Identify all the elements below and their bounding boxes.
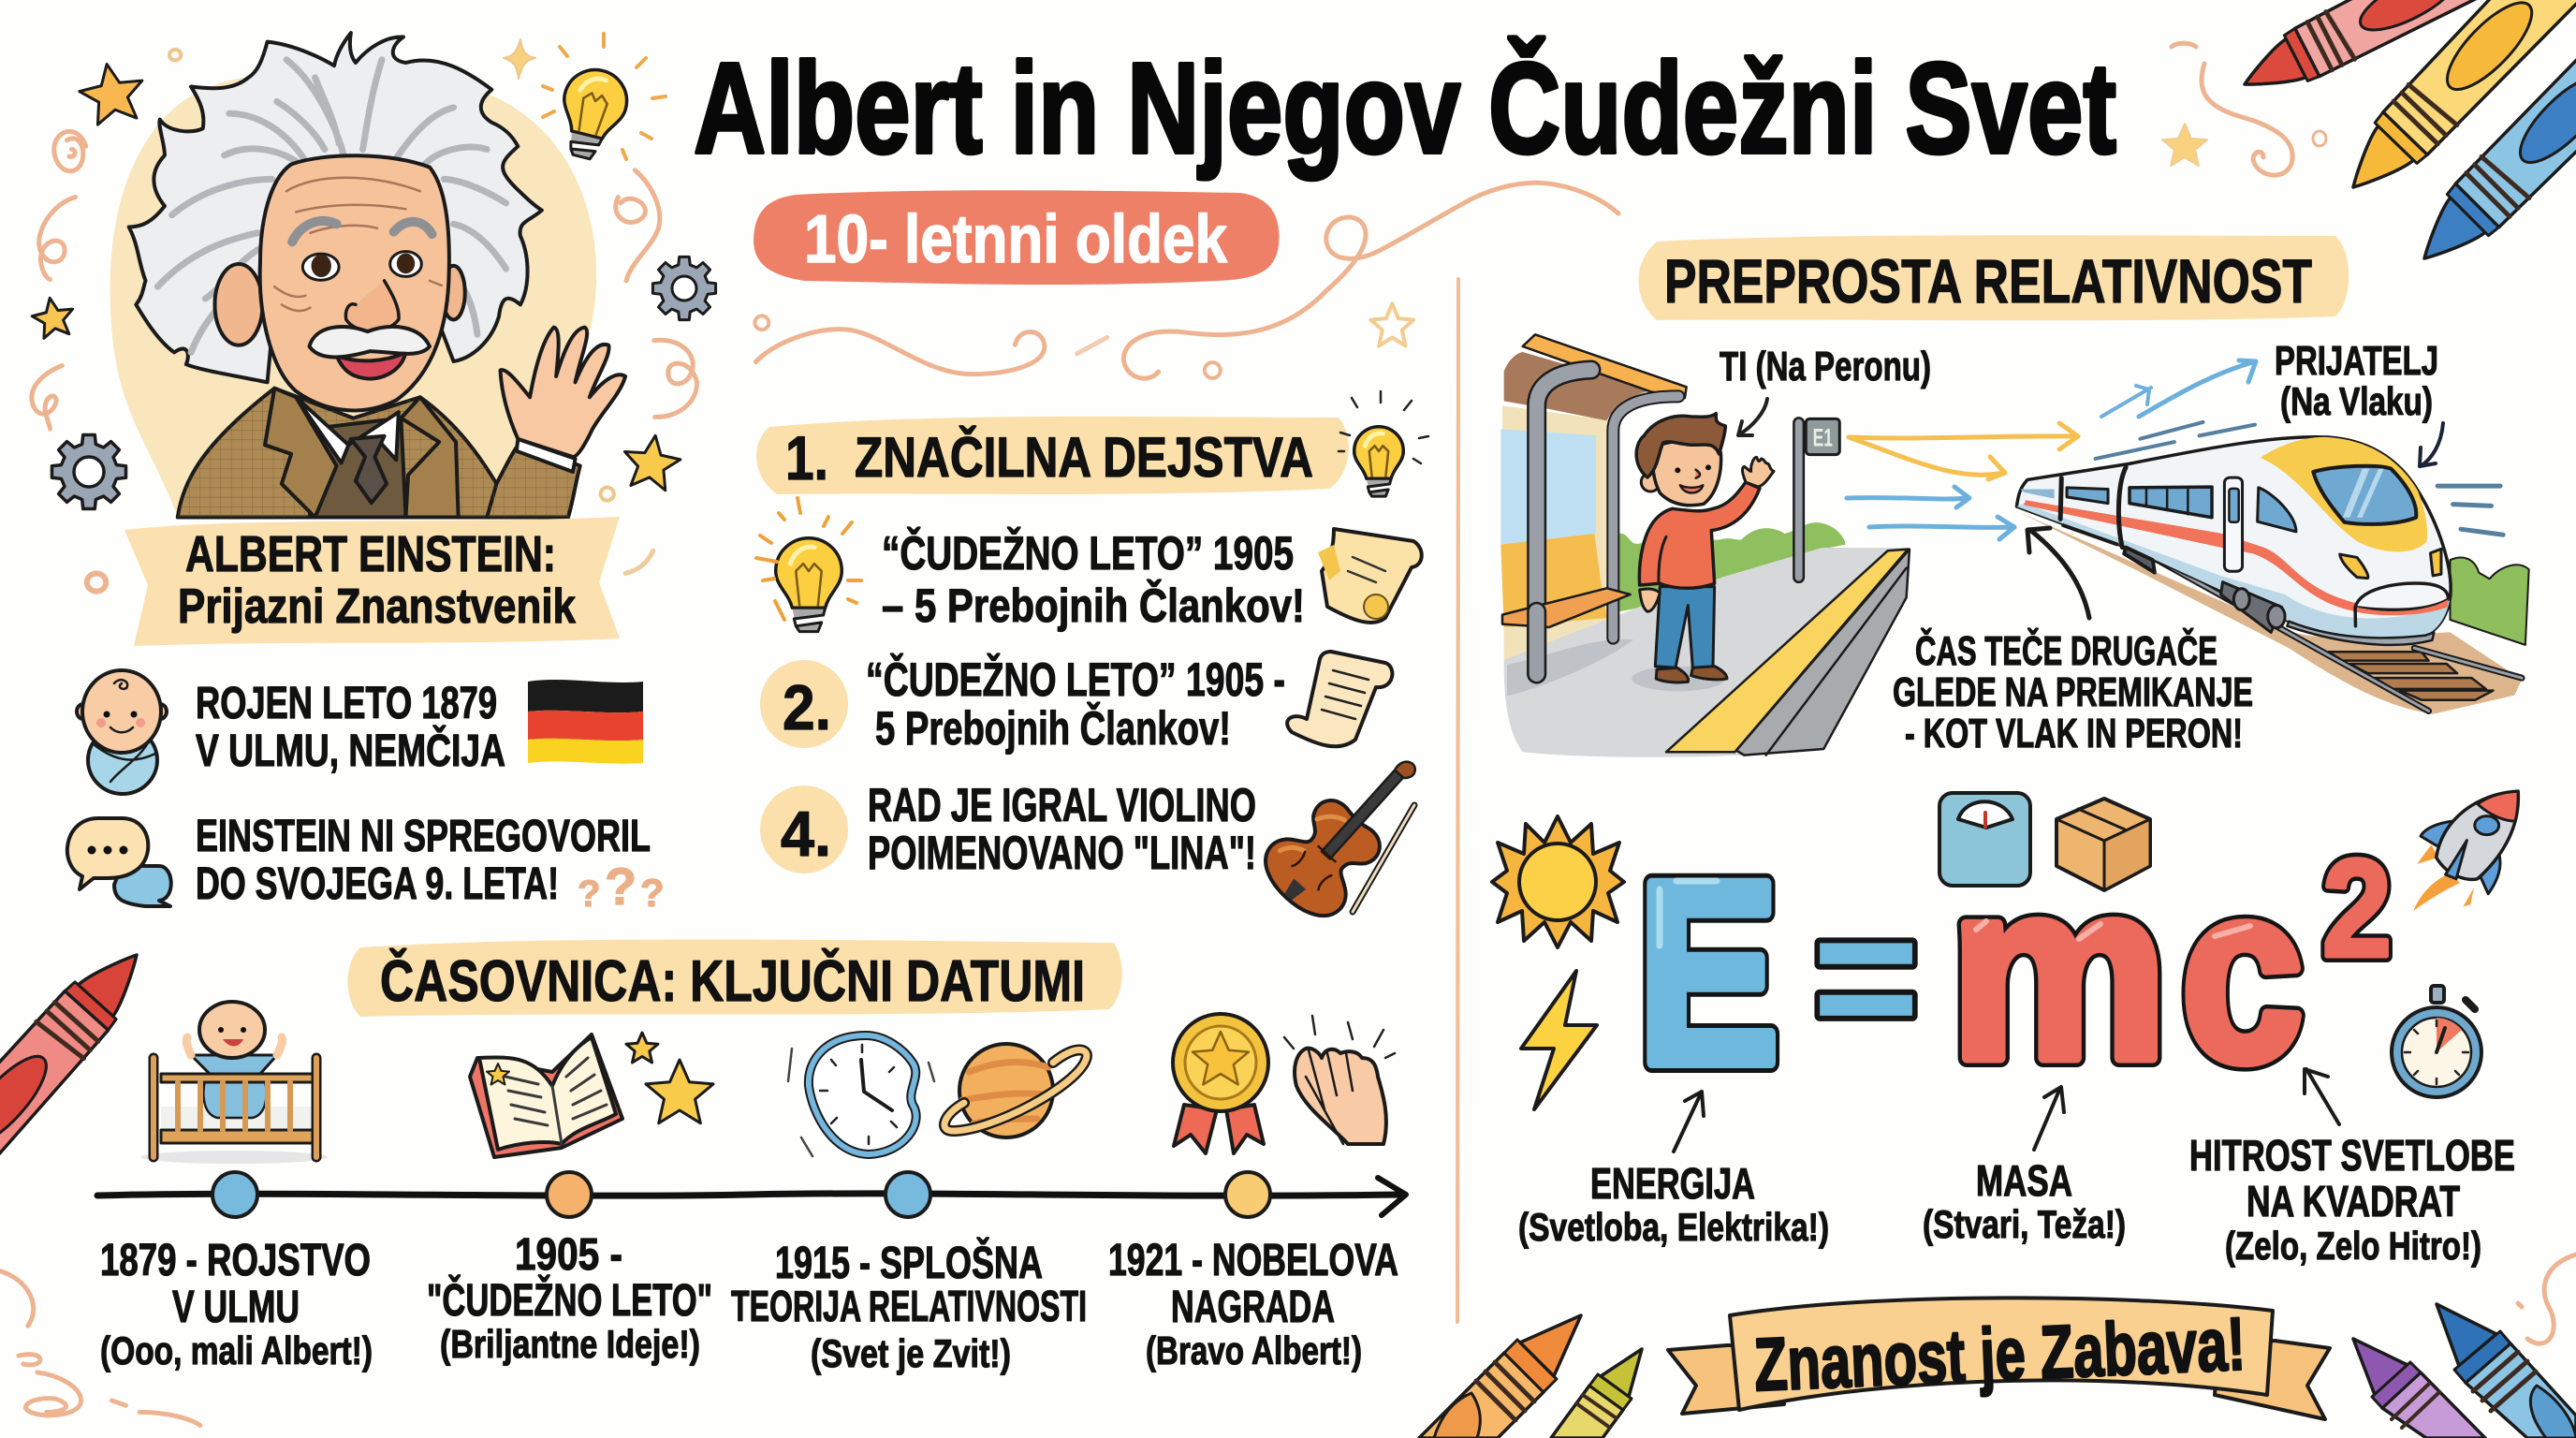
text: 1921: NAGRADA [1171,1283,1335,1332]
icon: rocket [2413,791,2518,911]
doodles bottom right [2518,1255,2576,1343]
arrow: mass [2034,1087,2064,1150]
icon: speech bubbles [67,818,171,906]
formula: m: m [1950,830,2168,1112]
text: energy: ENERGIJA [1590,1159,1755,1208]
crayon: blue bottom [2437,1304,2576,1438]
text: 1879: 1879 - ROJSTVO [100,1236,371,1285]
text: 1879: V ULMU [172,1283,300,1332]
illustration: platform scene: E1 [1813,424,1833,452]
text: energy [1518,1159,1829,1249]
icon: star [76,59,149,126]
formula: exponent: 2 [2322,831,2392,986]
jacket [178,389,580,518]
formula: E: E [1637,827,1779,1118]
timeline icon: crib [140,1002,328,1164]
title: Albert in Njegov Čudežni Svet [694,37,2116,181]
text: 1915: TEORIJA RELATIVNOSTI [731,1282,1087,1330]
formula: E: E [1637,827,1779,1118]
bushes [1619,522,1846,611]
illustration: platform scene [1500,334,1910,757]
question marks: ? [578,873,600,915]
text: fact 2 [866,653,1285,755]
icon: gold star [621,432,683,492]
heading: relativity: PREPROSTA RELATIVNOST [1664,246,2312,315]
badge: 4 [760,785,848,873]
platform shadow [1507,639,1633,696]
crayon: red left [0,933,161,1232]
formula: c: c [2181,832,2304,1114]
text: energy: (Svetloba, Elektrika!) [1518,1205,1829,1249]
label: friend [2275,338,2438,423]
crayon: orange bottom [1419,1315,1581,1438]
icon: gear left [51,434,126,509]
man: sweater and arm [1639,482,1760,588]
platform edge [1736,550,1910,756]
rails [2135,548,2522,711]
side windows [2130,487,2212,518]
door [2224,477,2243,571]
vest and shirt [300,418,406,518]
corner doodles bottom left [0,1271,200,1426]
crayon: blue top [2400,0,2576,283]
nose cap [2355,583,2449,626]
timeline icon: medal and clapping hands [1173,1014,1395,1153]
track bed [2020,513,2522,714]
text: 1905: "ČUDEŽNO LETO" [427,1274,712,1326]
text: time caption: - KOT VLAK IN PERON! [1905,711,2243,756]
tie [351,436,387,503]
text: birth: ROJEN LETO 1879 [196,679,497,728]
arrow: to train [2420,423,2443,466]
label: friend: PRIJATELJ [2275,338,2438,384]
formula: exponent: 2 [2322,831,2392,986]
text: 1921: (Bravo Albert!) [1146,1328,1362,1372]
cab side window [2258,488,2296,532]
text: 1905: 1905 - [515,1230,622,1280]
arrow: time caption pointer [2027,528,2089,618]
name text [178,526,576,634]
man: face details [1675,467,1680,473]
label: you: TI (Na Peronu) [1720,344,1931,389]
icon: gear right [652,257,716,320]
text: fact 4: RAD JE IGRAL VIOLINO [868,779,1256,831]
formula: c: c [2181,832,2304,1114]
ribbon banner: Znanost je Zabava! [1752,1302,2247,1406]
badge: 2: 2. [783,672,831,743]
heading: timeline: ČASOVNICA: KLJUČNI DATUMI [380,949,1085,1014]
text: time caption [1893,626,2253,756]
decorative doodles around portrait [32,50,697,592]
badge: 4: 4. [781,799,831,870]
lapels [265,389,337,518]
safety stripe [1666,550,1908,752]
formula: equals: = [1812,870,1920,1084]
platform [1504,548,1910,757]
question marks: ? [640,871,665,915]
hair strands [157,60,506,352]
hair [129,33,542,382]
sign post [1793,423,1805,578]
icon: scroll [1287,652,1392,746]
text: light speed: NA KVADRAT [2247,1177,2460,1225]
crayon: yellow top [2329,0,2576,211]
pole front repaint [1527,611,1546,674]
text: 1879: (Ooo, mali Albert!) [100,1328,373,1372]
crayon: green bottom [1551,1349,1642,1438]
text: 1915: (Svet je Zvit!) [811,1331,1011,1375]
name banner [124,517,620,646]
text: speech fact: DO SVOJEGA 9. LETA! [196,859,559,909]
name text: ALBERT EINSTEIN: [185,526,556,582]
carriage joints [2060,467,2126,548]
man: waving hand [1742,457,1774,487]
icon: lightning [1521,971,1597,1109]
man: shoes [1656,667,1727,682]
text: time caption: ČAS TEČE DRUGAČE [1915,626,2217,674]
bench [1502,588,1631,627]
icon: German flag [528,680,643,764]
name text: Prijazni Znanstvenik [178,580,576,634]
speed lines [2437,486,2503,535]
eyes [302,254,339,280]
nose [345,281,399,331]
text: light speed [2189,1131,2515,1268]
sleepers [2328,652,2493,700]
timeline icon: book and stars [470,1033,713,1157]
text: speech fact [196,812,651,909]
timeline dot 1915 [886,1172,930,1217]
motion arrows [1847,360,2256,539]
label: friend: (Na Vlaku) [2280,379,2433,423]
headlights [2340,554,2368,579]
waving hand [500,328,625,457]
icon: small star [30,295,77,340]
text: fact 1: “ČUDEŽNO LETO” 1905 [882,526,1294,580]
timeline dot 1905 [547,1172,592,1217]
text: 1915 [731,1237,1087,1375]
text: fact 4 [868,779,1256,879]
red stripe [2024,500,2449,615]
bush [2451,557,2529,645]
train body [2016,437,2451,642]
cuff [517,439,576,472]
icon: baby [77,670,167,794]
shelter poles [1537,370,1591,674]
icon: fact bulb [756,498,861,632]
eyebrows [292,221,432,242]
doodles top right [2162,43,2326,175]
background circle [110,74,596,514]
ribbon banner [1668,1298,2330,1419]
mustache [309,327,430,357]
subtitle pill: 10- letnni oldek [804,202,1228,277]
left ear [215,264,262,345]
timeline icon: warped clock and planet [788,1035,1087,1156]
text: mass: (Stvari, Teža!) [1923,1202,2126,1246]
heading: facts: ZNAČILNA DEJSTVA [855,426,1313,489]
bogies [2221,582,2282,632]
timeline axis [97,1172,1406,1217]
formula: m: m [1950,830,2168,1112]
icon: burnt scroll [1318,529,1422,623]
crayon: red top [2232,0,2546,110]
text: mass: MASA [1976,1156,2072,1205]
man: trousers [1655,587,1715,668]
decorative squiggle [754,183,1618,378]
text: 1905: (Briljantne Ideje!) [440,1322,700,1366]
question marks [578,857,665,916]
man: left hand [1640,589,1660,611]
icon: sparkle [504,39,535,79]
lower body [2016,504,2451,642]
icon: stopwatch [2392,986,2481,1097]
text: mass [1923,1156,2126,1246]
text: fact 1: – 5 Prebojnih Člankov! [882,579,1305,632]
Einstein illustration [110,33,625,518]
arrow: light speed [2305,1069,2339,1124]
text: 1921: 1921 - NOBELOVA [1108,1236,1398,1285]
text: fact 2: 5 Prebojnih Člankov! [875,701,1231,755]
question marks: ? [605,857,637,916]
sleeve [487,442,580,518]
text: light speed: (Zelo, Zelo Hitro!) [2225,1224,2481,1268]
illustration: train [2016,422,2529,714]
face [260,155,449,410]
text: birth: V ULMU, NEMČIJA [196,725,505,776]
icon: violin [1252,730,1444,930]
text: 1921 [1108,1236,1398,1372]
text: birth [196,679,505,776]
heading: facts: 1. [785,423,828,492]
forehead wrinkles [274,178,442,311]
icon: scale [1939,793,2030,886]
text: fact 1 [882,526,1305,632]
icon: heading bulb [1339,391,1428,496]
icon: sun [1492,816,1624,947]
shelter wall [1502,405,1617,662]
badge: 2 [760,660,848,748]
text: speech fact: EINSTEIN NI SPREGOVORIL [196,812,651,861]
yellow nose [2261,437,2427,551]
text: fact 2: “ČUDEŽNO LETO” 1905 - [866,653,1285,706]
text: fact 4: POIMENOVANO "LINA"! [868,827,1256,879]
heading: facts [756,417,1349,494]
windshield [2313,466,2416,524]
roof [1504,352,1654,420]
text: 1915: 1915 - SPLOŠNA [775,1237,1043,1288]
timeline dot 1879 [212,1172,257,1217]
arrow: energy [1674,1092,1704,1152]
man: hair [1636,414,1725,477]
text: 1879 [100,1236,373,1372]
panel: portrait [30,33,716,592]
icon: box [2056,799,2150,890]
icon: light bulb [543,34,666,165]
text: time caption: GLEDE NA PREMIKANJE [1893,669,2253,715]
right ear [442,266,465,319]
mouth [337,352,406,379]
text: 1905 [427,1230,712,1366]
timeline dot 1921 [1225,1172,1270,1217]
heading: relativity [1638,235,2349,320]
crayon: purple bottom [2353,1339,2485,1438]
arrow: to man [1738,399,1767,435]
panel divider [1457,279,1458,1322]
man: head [1641,473,1660,492]
